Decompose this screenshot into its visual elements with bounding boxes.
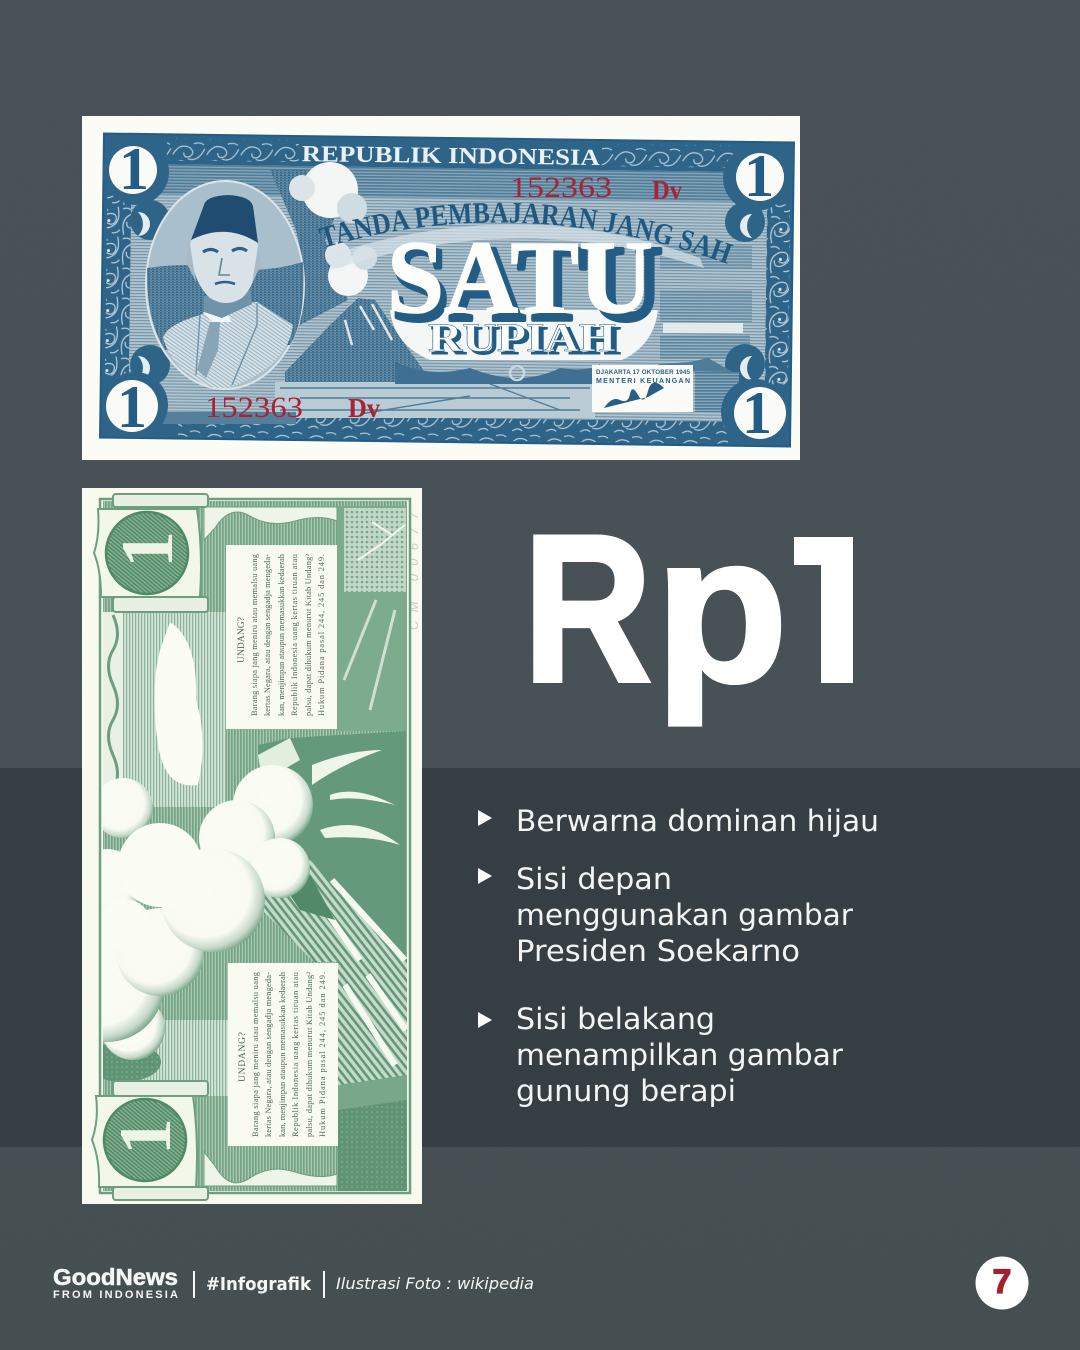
signature box (592, 365, 693, 412)
page number badge: 7 (993, 1263, 1011, 1301)
wave ornaments (204, 507, 337, 540)
legal text box: bottom: Barang siapa jang meniru atau memalsu uang (251, 971, 260, 1137)
erupting clouds (103, 765, 313, 1082)
dark crescent ornaments (130, 200, 765, 385)
volcano striated lower slope (262, 860, 407, 1090)
handwritten pencil mark: CM 00677 (406, 511, 421, 630)
volcano smoke (289, 162, 377, 296)
red serial numbers: Dv (348, 393, 380, 423)
arc slogan: TANDA PEMBAJARAN JANG SAH (318, 202, 734, 264)
paper (82, 488, 422, 1204)
SATU wordmark: SATU (387, 220, 653, 335)
neck (204, 290, 252, 318)
upper right foliage (337, 506, 407, 731)
legal text box: top: Republik Indonesia uang kertas tiruan atau (290, 553, 299, 716)
footer (53, 1264, 534, 1301)
legal text box: bottom: palsu, dapat dihukum menurut Kitab Undang² (305, 972, 314, 1137)
heading: Rp1 (533, 534, 853, 727)
bullet: back side: menampilkan gambar (516, 1038, 843, 1072)
logo (53, 1264, 178, 1301)
lower foliage (338, 1100, 407, 1191)
collar and tie (203, 305, 232, 322)
photo credit: Ilustrasi Foto : wikipedia (336, 1274, 534, 1293)
sky with white cloud (122, 612, 226, 807)
RUPIAH wordmark: RUPIAH (431, 318, 621, 363)
bullet: front side: Presiden Soekarno (516, 934, 800, 968)
bullet list (478, 804, 879, 1108)
bullet: back side (478, 1002, 843, 1108)
land foreground (156, 358, 739, 424)
legal text box: bottom: Hukum Pidana pasal 244, 245 dan 249. (318, 972, 327, 1137)
dark horizontal band (0, 768, 1080, 1147)
face (190, 232, 258, 303)
frame (100, 499, 410, 1193)
bullet: back side: Sisi belakang (516, 1002, 715, 1036)
engraved scene (103, 501, 407, 1191)
red serial numbers: 152363 (205, 391, 303, 424)
bullet: front side: Sisi depan (516, 862, 672, 896)
dark area behind smoke (270, 170, 348, 325)
red serial numbers (205, 171, 682, 424)
legal text box: bottom: UNDANG? (238, 1032, 248, 1082)
bullet: back side: gunung berapi (516, 1074, 736, 1108)
corner numerals: 1 (742, 380, 772, 446)
signature box: MENTERI KEUANGAN (596, 378, 690, 385)
legal text box: top: UNDANG? (237, 617, 247, 663)
banknote: back, green (50, 488, 422, 1204)
legal text box: bottom (228, 963, 338, 1146)
legal text box: top: palsu, dapat dihukum menurut Kitab Undang² (304, 554, 313, 716)
bullet: front side (478, 862, 853, 968)
legal text box: bottom: Republik Indonesia uang kertas tiruan atau (291, 971, 300, 1137)
volcano upper slope (258, 731, 406, 960)
corner numerals: 1 (117, 374, 147, 440)
page number badge (976, 1256, 1028, 1310)
legal text box: top: Hukum Pidana pasal 244, 245 dan 249. (317, 554, 326, 716)
corner numerals: 1 (744, 143, 774, 209)
fez (191, 195, 258, 243)
legal text box: top: kertas Negara, atau dengan sengadja mengeda- (263, 554, 272, 716)
bullet: front side: menggunakan gambar (516, 898, 853, 932)
heading: Rp1: R (523, 491, 652, 726)
corner numerals (102, 136, 789, 446)
volcano (285, 298, 432, 382)
logo: FROM INDONESIA (53, 1289, 178, 1301)
top scroll with numeral (94, 494, 208, 612)
hashtag: #Infografik (206, 1274, 312, 1295)
legal text box: bottom: kan, menjimpan ataupun memasukkan kedaerah (278, 971, 287, 1137)
logo: GoodNews (53, 1264, 178, 1290)
heading: Rp1: p (655, 491, 788, 726)
RUPIAH wordmark: RUPIAH (428, 315, 616, 360)
red serial numbers: Dv (652, 175, 682, 205)
bottom scroll with numeral: 1 (105, 1118, 187, 1155)
sky tone bands (660, 245, 752, 359)
top scroll with numeral: 1 (107, 531, 189, 568)
legal text box: bottom: kertas Negara, atau dengan sengadja mengeda- (264, 972, 273, 1137)
signature box: DJAKARTA 17 OKTOBER 1945 (596, 369, 691, 376)
tilted printed frame with border, banner, bottom band (100, 134, 794, 447)
red serial numbers: 152363 (510, 171, 612, 204)
legal text box: top (226, 545, 337, 729)
suit (163, 302, 293, 388)
left ornament strip (103, 612, 123, 786)
bottom scroll with numeral (92, 1081, 208, 1200)
legal text box: top: Barang siapa jang meniru atau memalsu uang (250, 553, 259, 716)
corner numerals: 1 (119, 136, 149, 202)
heading: Rp1: 1 (778, 491, 895, 726)
tilted printed frame with border, banner, bottom band: REPUBLIK INDONESIA (302, 141, 600, 170)
SATU cartouche (390, 310, 658, 360)
paper (82, 116, 800, 460)
divider (193, 1271, 195, 1298)
banknote: front, blue (82, 116, 800, 460)
lower sky strip (140, 1020, 228, 1096)
divider (323, 1271, 325, 1298)
bullet: dominant colour: Berwarna dominan hijau (516, 804, 879, 838)
portrait oval (146, 181, 304, 389)
SATU wordmark: SATU (391, 225, 663, 344)
legal text box: top: kan, menjimpan ataupun memasukkan kedaerah (277, 553, 286, 716)
